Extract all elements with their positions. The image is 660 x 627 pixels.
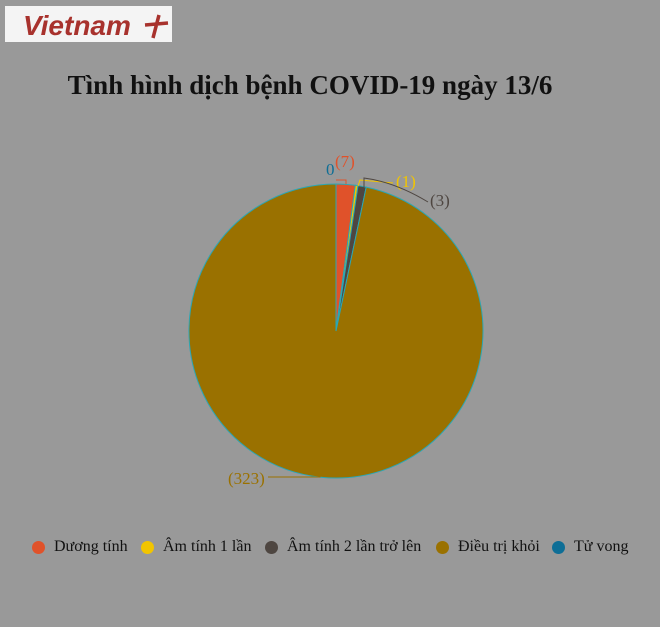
logo: Vietnam: [23, 10, 131, 41]
pie labels: (323): [228, 469, 265, 488]
pie labels: [228, 152, 450, 488]
pie labels: (1): [396, 172, 416, 191]
pie labels: (7): [335, 152, 355, 171]
text: Tử vong: [574, 538, 628, 555]
text: Âm tính 1 lần: [163, 538, 251, 555]
text: Âm tính 2 lần trở lên: [287, 538, 421, 555]
text: Điều trị khỏi: [458, 538, 540, 555]
pie labels: (3): [430, 191, 450, 210]
title: Tình hình dịch bệnh COVID-19 ngày 13/6: [68, 70, 552, 100]
logo: [5, 6, 172, 42]
legend: [32, 537, 628, 555]
text: Dương tính: [54, 538, 128, 555]
pie labels: 0: [326, 160, 334, 179]
